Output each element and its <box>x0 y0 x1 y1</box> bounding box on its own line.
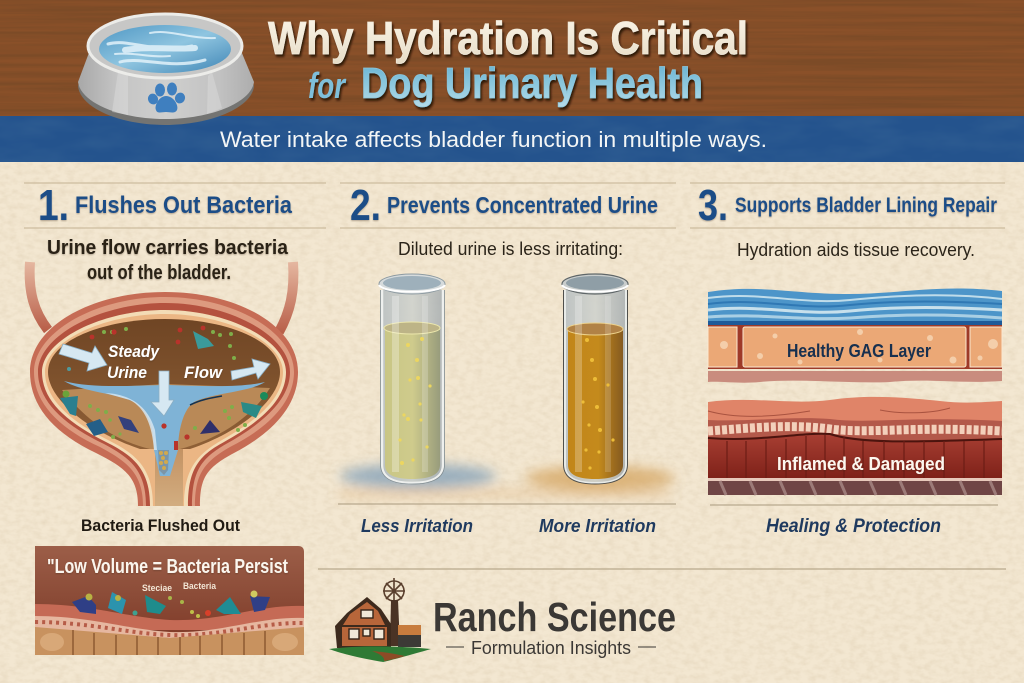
particles in urethra <box>158 450 169 475</box>
logo: ranch barn <box>329 578 431 662</box>
heading 2: Prevents Concentrated Urine <box>387 192 658 218</box>
rule: footer <box>318 568 1006 570</box>
label: less irritation: Less Irritation <box>361 516 473 536</box>
title <box>268 12 748 108</box>
basal strip <box>708 478 1002 481</box>
tube: less irritation <box>379 274 445 484</box>
rule: column 2 <box>338 503 676 505</box>
cell specks <box>720 329 998 364</box>
subtitle text: Water intake affects bladder function in multiple ways. <box>220 127 767 152</box>
flow labels: Steady <box>108 342 160 361</box>
title: Why Hydration Is Critical <box>268 12 748 64</box>
bench shadows <box>340 464 675 496</box>
inflamed tissue diagram <box>708 397 1002 495</box>
ureters <box>30 262 293 332</box>
muscle fibres <box>727 435 984 478</box>
healthy tissue diagram <box>708 289 1002 383</box>
logo wordmark: Ranch Science <box>433 594 676 640</box>
connective strip <box>708 371 1002 383</box>
heading 1: 1. <box>38 181 69 230</box>
inflamed label: Inflamed & Damaged <box>777 454 945 474</box>
subtitle band <box>0 116 1024 162</box>
flow labels <box>107 342 224 382</box>
label: healing and protection: Healing & Protection <box>766 516 941 537</box>
windmill <box>383 578 405 604</box>
flow labels: Urine <box>107 363 147 382</box>
heading 1: Flushes Out Bacteria <box>75 192 293 219</box>
flow arrows <box>59 344 270 416</box>
bacteria <box>60 331 268 436</box>
bladder wall <box>30 292 298 506</box>
tissue band <box>35 604 304 630</box>
field <box>329 646 431 662</box>
small labels: Steciae <box>142 583 172 593</box>
low volume heading: "Low Volume = Bacteria Persist <box>47 556 288 578</box>
panel: low volume bacteria <box>35 546 304 655</box>
urine stream <box>64 381 265 476</box>
tissue cells <box>35 627 304 655</box>
header: wood banner <box>0 0 1024 118</box>
bubbles <box>398 337 432 465</box>
bacteria clusters <box>72 590 270 618</box>
heading 3 <box>698 181 997 230</box>
bacteria specks <box>67 327 247 439</box>
red specks <box>90 326 205 450</box>
small labels: Bacteria <box>183 581 217 591</box>
bubbles <box>581 338 615 470</box>
logo wordmark <box>433 594 676 658</box>
label: more irritation: More Irritation <box>539 516 656 536</box>
title: Dog Urinary Health <box>361 59 703 108</box>
heading 2 <box>350 181 658 230</box>
water layer <box>708 289 1002 324</box>
barn <box>335 597 391 648</box>
rule: column 3 <box>710 504 998 506</box>
tube: more irritation <box>562 274 628 484</box>
label: bacteria flushed out: Bacteria Flushed Out <box>81 516 240 535</box>
text: column 3 intro: Hydration aids tissue recovery. <box>737 240 975 260</box>
flow labels: Flow <box>184 363 224 382</box>
icon: dog water bowl <box>78 14 254 125</box>
text: column 1 intro <box>47 237 289 284</box>
text: column 1 intro: Urine flow carries bacteria <box>47 237 289 259</box>
heading 3: 3. <box>698 181 728 230</box>
water ripples <box>108 32 215 64</box>
heading 2: 2. <box>350 181 381 230</box>
healthy label: Healthy GAG Layer <box>787 341 931 361</box>
small labels <box>142 581 217 593</box>
text: column 2 intro: Diluted urine is less irritating: <box>398 239 623 259</box>
fibrous layer <box>708 427 1002 431</box>
bladder illustration <box>30 262 298 506</box>
text: column 1 intro: out of the bladder. <box>87 262 231 284</box>
section rules <box>24 183 1005 228</box>
bladder cavity <box>48 319 280 449</box>
heading 1 <box>38 181 293 230</box>
epithelial cells <box>708 325 1002 369</box>
title: for <box>308 65 347 106</box>
urethra channel <box>155 449 183 506</box>
tagline: Formulation Insights <box>471 638 631 658</box>
test tubes illustration <box>340 274 675 496</box>
icon: paw print <box>146 82 187 112</box>
